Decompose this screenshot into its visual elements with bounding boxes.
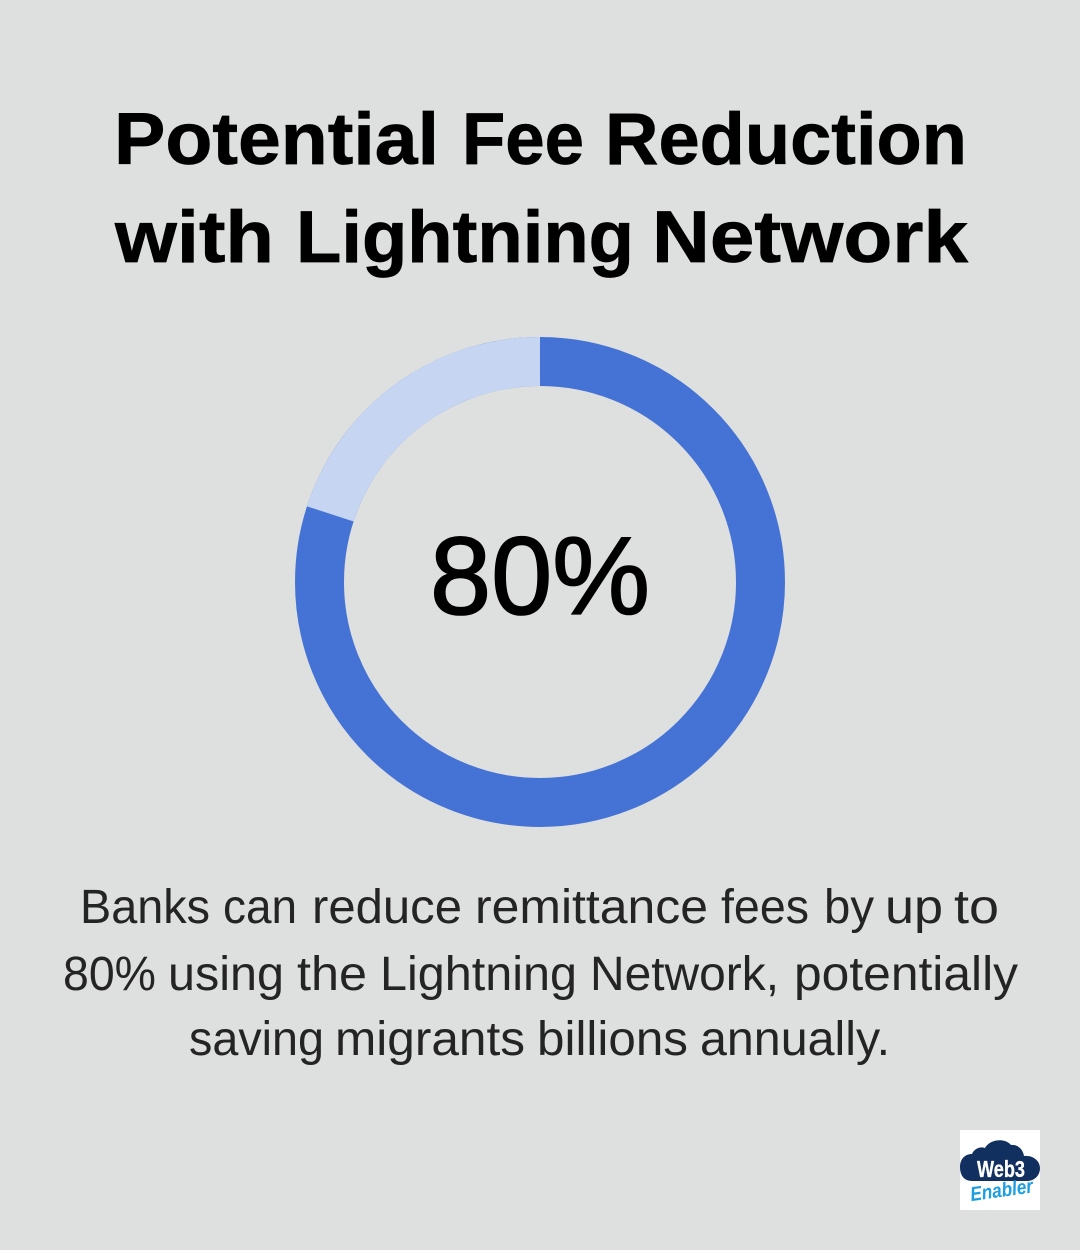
remaining 20% arc bbox=[330, 362, 540, 514]
donut chart: 80% bbox=[320, 362, 760, 802]
description text: up bbox=[885, 881, 943, 934]
description text: 80% bbox=[63, 948, 156, 1001]
description text: the bbox=[297, 948, 367, 1001]
title: Fee bbox=[462, 99, 584, 180]
description text: fees bbox=[721, 881, 809, 934]
description text bbox=[63, 881, 1018, 1066]
description text: Banks bbox=[80, 881, 210, 934]
description text: Network, bbox=[590, 948, 779, 1001]
description text: potentially bbox=[794, 948, 1018, 1001]
logo cloud bbox=[960, 1140, 1040, 1181]
description text: reduce bbox=[312, 881, 462, 934]
title: Potential bbox=[114, 99, 439, 180]
description text: migrants bbox=[335, 1013, 525, 1066]
title bbox=[114, 99, 968, 278]
center value: 80% bbox=[430, 515, 650, 638]
title: Network bbox=[652, 197, 968, 278]
description text: annually. bbox=[700, 1013, 890, 1066]
description text: to bbox=[954, 881, 999, 934]
description text: Lightning bbox=[380, 948, 577, 1001]
logo: Web3 Enabler bbox=[960, 1130, 1040, 1210]
description text: remittance bbox=[475, 881, 708, 934]
description text: can bbox=[223, 881, 297, 934]
description text: by bbox=[824, 881, 874, 934]
title: with bbox=[114, 197, 274, 278]
logo script: Enabler bbox=[969, 1175, 1035, 1206]
logo wordmark: Web3 bbox=[977, 1156, 1025, 1182]
title: Reduction bbox=[605, 99, 967, 180]
description text: billions bbox=[537, 1013, 688, 1066]
description text: using bbox=[168, 948, 284, 1001]
description text: saving bbox=[189, 1013, 324, 1066]
title: Lightning bbox=[296, 197, 634, 278]
